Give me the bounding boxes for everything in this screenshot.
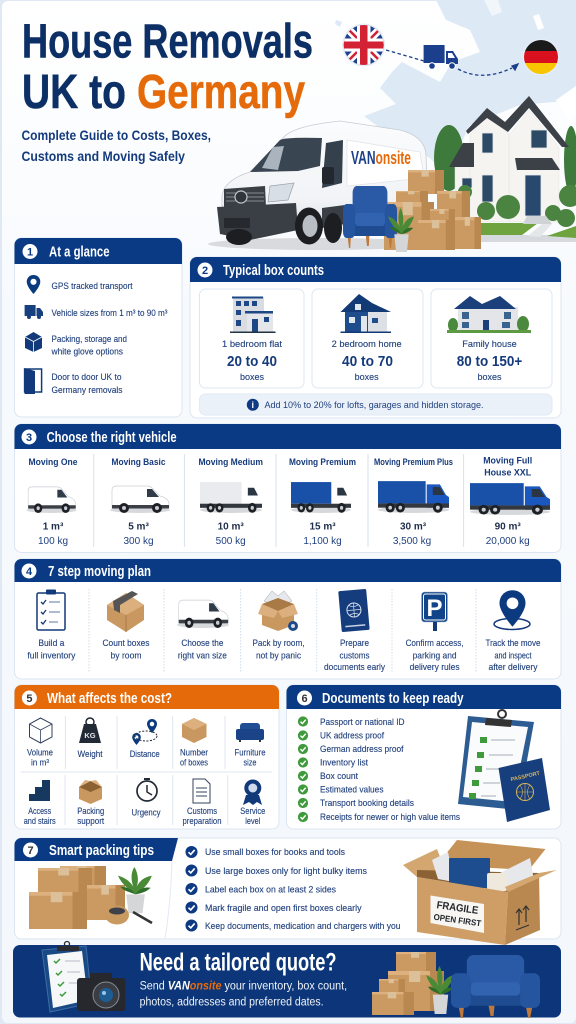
vehicle: Moving Full House XXL: 90 m³ [495,522,521,532]
text: packing [51,334,127,356]
step 5: prepare customs documents: documents early [324,662,385,672]
text: packing: Packing, storage and [52,334,127,344]
step 6: confirm access and parking: Confirm access, [406,638,464,648]
text: CTA body: photos, addresses and preferred dates. [140,996,324,1008]
item: weight [78,718,103,759]
panel: call to action [13,942,561,1018]
icon: door [25,368,42,394]
tip list: Label each box on at least 2 sides [205,884,336,894]
item: packing support [77,780,105,826]
step 3: choose the right van size: Choose the [181,638,223,648]
icon: camera [77,973,126,1011]
label: fragile open first: FRAGILE [436,899,479,917]
subtitle: Customs and Moving Safely [22,148,185,164]
illustration: boxes [384,170,481,250]
header: documents [286,685,561,709]
vehicle: Moving Full House XXL: Moving Full [483,456,532,466]
checklist: Inventory list [320,758,368,768]
header: at a glance: 1 [27,246,33,258]
vehicle: Moving Full House XXL: 20,000 kg [486,536,530,547]
map background [335,0,576,175]
panel: at a glance [14,238,182,417]
step 6: confirm access and parking: delivery rules [410,662,460,672]
item: volume: Volume [27,748,53,758]
item: number of boxes: Number [180,748,208,758]
item: customs preparation: preparation [182,816,222,826]
text: vehicle sizes: Vehicle sizes from 1 m³ to 90 m³ [52,308,168,318]
step 4: pack by room [252,591,304,660]
roofs [449,96,569,170]
vehicle: Moving Premium Plus: 30 m³ [400,522,427,532]
header: typical box counts: Typical box counts [223,263,324,279]
illustration: passport: PASSPORT [510,771,541,783]
text: CTA body: Send VANonsite your inventory, box count, [140,980,347,992]
tip list [185,846,400,932]
card: 2 bedroom home: boxes [355,372,379,382]
tip list: Use small boxes for books and tools [205,847,345,857]
trees [434,125,576,194]
card: 1 bedroom flat: 20 to 40 [227,353,277,370]
panel: documents to keep ready [286,685,561,829]
subtitle [22,127,211,164]
vehicle: Moving Basic: Moving Basic [112,457,166,468]
note: add 10% to 20%: Add 10% to 20% for lofts, garages and hidden storage. [264,400,484,411]
vehicle: Moving One [26,457,78,547]
panel: choose the right vehicle [14,424,561,552]
item: distance: Distance [130,749,160,759]
panel: 7 step moving plan [14,559,561,679]
item: weight: Weight [78,749,103,759]
title [22,16,313,119]
header: smart packing tips [14,838,178,861]
item: furniture size: Furniture [234,748,266,758]
item: volume [27,718,53,768]
vehicle: Moving Medium: Moving Medium [198,457,263,468]
header: smart packing tips: 7 [27,845,34,857]
item: number of boxes: of boxes [180,758,208,768]
icon: home [340,294,391,333]
vehicle: Moving Premium: 1,100 kg [303,536,342,547]
step 1: build a full inventory [27,590,76,660]
item: number of boxes [180,718,208,768]
illustration: plant [388,208,414,252]
card: 1 bedroom flat: 1 bedroom flat [222,339,282,350]
step 2: count boxes by room: by room [110,650,142,660]
checklist: Transport booking details [320,798,414,808]
label: fragile open first [430,896,484,933]
step 7: track the move: and inspect [494,650,532,660]
illustration: CTA plant [426,966,454,1014]
title: UK to [22,66,126,119]
icon: UK flag [342,24,385,66]
header: 7 step moving plan [14,559,561,582]
checklist: Estimated values [320,784,384,794]
title: House Removals [22,16,313,68]
checklist: Passport or national ID [320,717,405,727]
header: 7 step moving plan: 4 [26,566,33,578]
shrubs [458,185,576,227]
note: add 10% to 20%: i [252,400,254,410]
text: CTA body [140,980,347,1008]
header: choose the right vehicle: Choose the right vehicle [47,430,177,446]
header: typical box counts: 2 [202,265,208,277]
step 3: choose the right van size: right van size [178,650,227,660]
panel: what affects the cost [14,685,279,829]
icon: flat [230,296,276,333]
vehicle: Moving Premium [289,457,356,547]
step 3: choose the right van size [177,600,229,660]
icon: route truck [424,45,458,69]
illustration: passport [498,758,550,822]
vehicle: Moving Basic: 300 kg [123,536,154,547]
header: typical box counts [190,257,561,282]
item: service level [240,780,265,826]
icon: package [25,332,42,352]
header: what affects the cost: 5 [26,693,32,705]
illustration: CTA armchair [451,955,540,1018]
vehicle: Moving Basic [110,457,170,547]
tip list: Use large boxes only for light bulky items [205,866,367,876]
vehicle: Moving Premium: 15 m³ [309,522,336,532]
step 5: prepare customs documents: Prepare [340,638,369,648]
header: documents: 6 [301,693,308,705]
vehicle: Moving Medium: 500 kg [216,536,246,547]
step 4: pack by room: not by panic [256,650,301,660]
vehicle: Moving Medium [198,457,263,547]
illustration: stacked boxes [29,866,125,929]
header: choose the right vehicle [14,424,561,449]
step 6: confirm access and parking: parking and [413,650,457,660]
vehicle: Moving Basic: 5 m³ [128,522,149,532]
arrow: route from UK to Germany [386,50,518,75]
item: access and stairs: and stairs [24,816,56,826]
checklist: UK address proof [320,730,384,740]
header: 7 step moving plan: 7 step moving plan [48,564,151,580]
step 5: prepare customs documents [324,589,385,672]
step 7: track the move: Track the move [486,638,540,648]
vehicle: Moving One: 1 m³ [43,522,64,532]
text: packing: white glove options [51,346,123,356]
icon: truck [25,305,43,319]
header: documents: Documents to keep ready [322,691,464,707]
illustration: armchair [343,186,397,248]
card: 2 bedroom home: 40 to 70 [342,353,393,370]
title: Germany [137,66,305,119]
vehicle: Moving Premium Plus: 3,500 kg [393,536,431,547]
header: what affects the cost: What affects the cost? [47,691,172,707]
vehicle: Moving Premium Plus: Moving Premium Plus [374,457,453,468]
card: 1 bedroom flat: boxes [240,372,265,382]
vehicle: Moving Premium: Moving Premium [289,457,356,468]
item: access and stairs [24,780,56,826]
text: CTA heading: Need a tailored quote? [140,948,337,976]
item: weight: KG [84,731,96,740]
item: packing support: support [77,816,105,826]
item: service level: Service [240,806,265,816]
tip list: Mark fragile and open first boxes clearly [205,903,362,913]
icon: GPS pin [27,275,40,294]
vehicle: Moving One: Moving One [28,457,78,468]
text: door to door: Door to door UK to [52,372,122,382]
panel: smart packing tips [14,838,561,945]
icon: family house [447,296,531,333]
checklist: Box count [320,771,358,781]
illustration: packing plant [118,867,152,913]
illustration: fragile box [403,840,557,945]
card: family house: Family house [462,339,517,350]
item: urgency: Urgency [132,808,161,818]
header: choose the right vehicle: 3 [26,432,32,444]
card: family house: boxes [477,372,502,382]
text: door to door [52,372,123,395]
illustration: CTA boxes [372,952,444,1015]
label: fragile open first: OPEN FIRST [433,912,483,928]
text: GPS: GPS tracked transport [52,281,133,291]
illustration: clipboard [458,710,534,810]
card: 2 bedroom home: 2 bedroom home [332,339,402,350]
step 4: pack by room: Pack by room, [252,638,304,648]
item: volume: in m³ [31,758,49,768]
card: family house [431,289,552,388]
item: urgency [132,778,161,818]
vehicle: Moving One: 100 kg [38,536,68,547]
text: door to door: Germany removals [52,385,123,395]
card: 1 bedroom flat [200,289,304,388]
lawn and path [452,223,576,242]
item: furniture size [234,723,266,768]
card: family house: 80 to 150+ [457,353,522,370]
step 5: prepare customs documents: customs [340,650,370,660]
checklist: German address proof [320,744,404,754]
step 1: build a full inventory: full inventory [27,650,76,660]
icon: Germany flag [522,38,560,76]
subtitle: Complete Guide to Costs, Boxes, [22,127,211,143]
vehicle: Moving Full House XXL: House XXL [484,468,531,478]
illustration: VANonsite van [208,121,432,250]
tip list: Keep documents, medication and chargers with you [205,921,400,931]
illustration: tape and marker [105,906,152,924]
vehicle: Moving Premium Plus [374,457,453,547]
item: access and stairs: Access [28,806,52,816]
header: at a glance [14,238,182,264]
item: customs preparation: Customs [187,806,217,816]
step 2: count boxes by room: Count boxes [102,638,150,648]
step 7: track the move [486,590,540,672]
step 1: build a full inventory: Build a [38,638,64,648]
step 7: track the move: after delivery [488,662,538,672]
text: van logo: VANonsite [351,148,411,168]
item: service level: level [245,816,260,826]
illustration: house [434,96,576,242]
item: distance [130,719,160,759]
step 2: count boxes by room [102,591,150,660]
vehicle: Moving Full House XXL [470,456,550,547]
header: what affects the cost [14,685,279,709]
item: customs preparation [182,779,222,826]
vehicle: Moving Medium: 10 m³ [218,522,244,532]
walls [455,110,559,222]
item: packing support: Packing [77,806,104,816]
windows and door [462,130,547,216]
header: smart packing tips: Smart packing tips [49,843,154,859]
note: add 10% to 20% [200,394,552,415]
step 6: confirm access and parking: P [426,595,443,622]
item: furniture size: size [244,758,256,768]
checklist: Receipts for newer or high value items [320,812,460,822]
checklist [298,716,460,822]
card: 2 bedroom home [312,289,423,388]
header: at a glance: At a glance [49,244,110,260]
panel: typical box counts [190,257,561,418]
step 6: confirm access and parking [406,592,464,672]
illustration: checklist clipboard [42,942,92,1012]
